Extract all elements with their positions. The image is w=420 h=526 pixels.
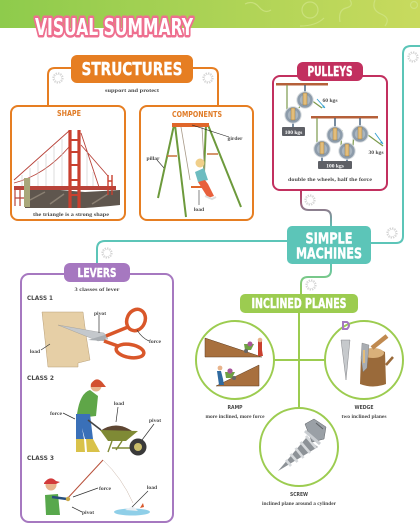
gear icons	[53, 52, 418, 290]
pulleys banner: PULLEYS	[308, 65, 352, 80]
panel: ramp	[196, 321, 274, 420]
class 3: fisherman	[44, 460, 150, 516]
panel: components: pillar	[146, 156, 160, 162]
panel: wedge: two inclined planes	[342, 414, 387, 420]
panel: screw: inclined plane around a cylinder	[262, 501, 336, 507]
panel: levers: pivot	[94, 311, 106, 317]
pulley diagram: four wheels	[311, 116, 384, 170]
panel: levers: CLASS 3	[27, 454, 54, 462]
panel: levers: CLASS 2	[27, 374, 54, 382]
panel: components	[140, 106, 253, 220]
panel: levers: load	[114, 401, 125, 407]
pulley diagram: two wheels: 60 kgs	[322, 98, 338, 104]
panel: components: load	[194, 207, 205, 213]
panel: levers: CLASS 1	[27, 294, 53, 302]
panel: structures banner: STRUCTURES	[82, 59, 182, 80]
panel: structures banner	[71, 55, 193, 83]
panel: shape	[11, 106, 125, 220]
panel: levers: force	[149, 339, 162, 345]
pulley diagram: two wheels	[276, 83, 338, 136]
wedge and log illustration	[341, 336, 393, 386]
panel: levers	[21, 274, 173, 522]
simple machines banner	[287, 226, 371, 264]
panel: wedge	[325, 321, 403, 420]
title: VISUAL SUMMARY	[35, 15, 193, 41]
screw illustration	[278, 419, 326, 471]
panel: shape: the triangle is a strong shape	[33, 212, 110, 218]
swing illustration	[157, 123, 241, 217]
pulley diagram: four wheels: 30 kgs	[368, 150, 384, 156]
ramp illustrations	[205, 338, 263, 386]
panel: pulleys	[273, 76, 387, 190]
panel: levers: load	[30, 349, 41, 355]
levers banner: LEVERS	[78, 265, 116, 280]
panel: components: girder	[228, 136, 243, 142]
panel: levers: pivot	[149, 418, 161, 424]
panel: levers: 3 classes of lever	[74, 287, 120, 293]
panel: levers: pivot	[82, 510, 94, 516]
connector lines	[48, 46, 420, 295]
panel: ramp: more inclined, more force	[206, 414, 265, 420]
simple machines banner: SIMPLE	[306, 230, 352, 248]
text: support and protect: support and protect	[105, 88, 159, 94]
inclined planes banner	[240, 294, 358, 313]
pulley diagram: four wheels: 100 kgs	[326, 164, 344, 170]
panel: levers: force	[50, 411, 63, 417]
panel: levers: force	[99, 486, 112, 492]
bridge illustration	[14, 130, 120, 208]
panel: pulleys: double the wheels, half the force	[288, 177, 373, 183]
pulley diagram: two wheels: 100 kgs	[285, 130, 302, 136]
class 2: man with wheelbarrow	[63, 379, 154, 456]
panel: screw	[260, 408, 338, 507]
class 1: scissors and paper	[41, 306, 149, 367]
header band	[0, 0, 420, 28]
icon: purple arc fragment	[343, 322, 349, 329]
panel: shape: SHAPE	[57, 109, 81, 118]
panel: wedge: WEDGE	[354, 405, 374, 411]
panel: components: COMPONENTS	[172, 110, 222, 119]
levers banner	[64, 263, 130, 282]
connector lines: inclined planes	[274, 312, 325, 410]
simple machines banner: MACHINES	[296, 244, 362, 262]
panel: screw: SCREW	[290, 492, 308, 498]
panel: levers: load	[147, 485, 158, 491]
panel: ramp: RAMP	[228, 405, 242, 411]
inclined planes banner: INCLINED PLANES	[252, 297, 346, 312]
pulleys banner	[297, 62, 363, 81]
